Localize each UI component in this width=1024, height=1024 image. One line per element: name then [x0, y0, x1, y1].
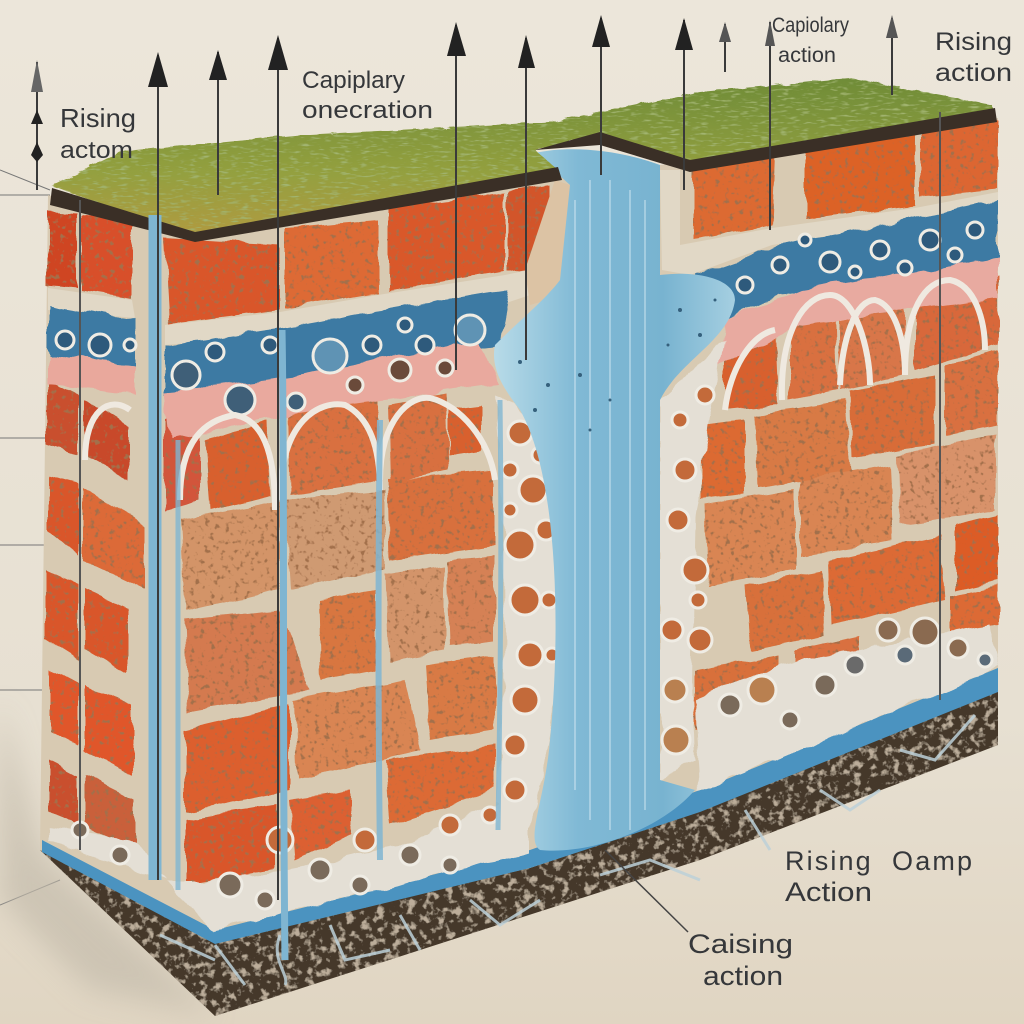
label: capillary operation: Capiplary [302, 67, 405, 94]
label: rising action right: action [935, 59, 1012, 87]
white lattice zones [48, 340, 998, 930]
label: rising damp action: Rising Oamp [785, 846, 972, 876]
grass top [50, 78, 997, 242]
mortar strips [48, 170, 998, 345]
label: capillary action right: action [778, 44, 836, 67]
label: rising action left: actom [60, 137, 133, 164]
arches in upper walls [85, 280, 985, 510]
shaded ground shadow [0, 700, 215, 1015]
label: causing action: Caising [688, 929, 793, 959]
label: rising damp action: Action [785, 877, 872, 907]
bricks: right face [692, 120, 998, 730]
annotation lines at left margin [0, 170, 60, 905]
label: rising damp action [785, 846, 972, 907]
label: capillary action right: Capiolary [772, 14, 849, 37]
pore holes [56, 222, 992, 909]
blue damp band: upper right [695, 200, 998, 365]
label: rising action left: Rising [60, 103, 136, 133]
bricks: main left face [165, 185, 550, 885]
wall mortar body [40, 118, 998, 945]
water droplets [518, 298, 716, 432]
label: capillary operation: onecration [302, 97, 433, 124]
arrows [31, 15, 940, 900]
label: capillary action right [772, 14, 849, 67]
label: rising action right: Rising [935, 28, 1012, 56]
water streak lines [575, 180, 645, 830]
water channel [494, 149, 735, 851]
label: causing action: action [703, 961, 783, 991]
bricks: left return face [46, 210, 145, 850]
blue damp band: bottom [42, 668, 998, 944]
label: capillary operation [302, 67, 433, 124]
blue damp band: upper left [48, 290, 510, 440]
soil pore network [160, 715, 975, 985]
leader line to channel base [605, 850, 688, 932]
soil base [40, 690, 998, 1016]
label: rising action right [935, 28, 1012, 87]
label: rising action left [60, 103, 136, 164]
label: causing action [688, 929, 793, 991]
rising damp blue streaks [155, 215, 501, 960]
